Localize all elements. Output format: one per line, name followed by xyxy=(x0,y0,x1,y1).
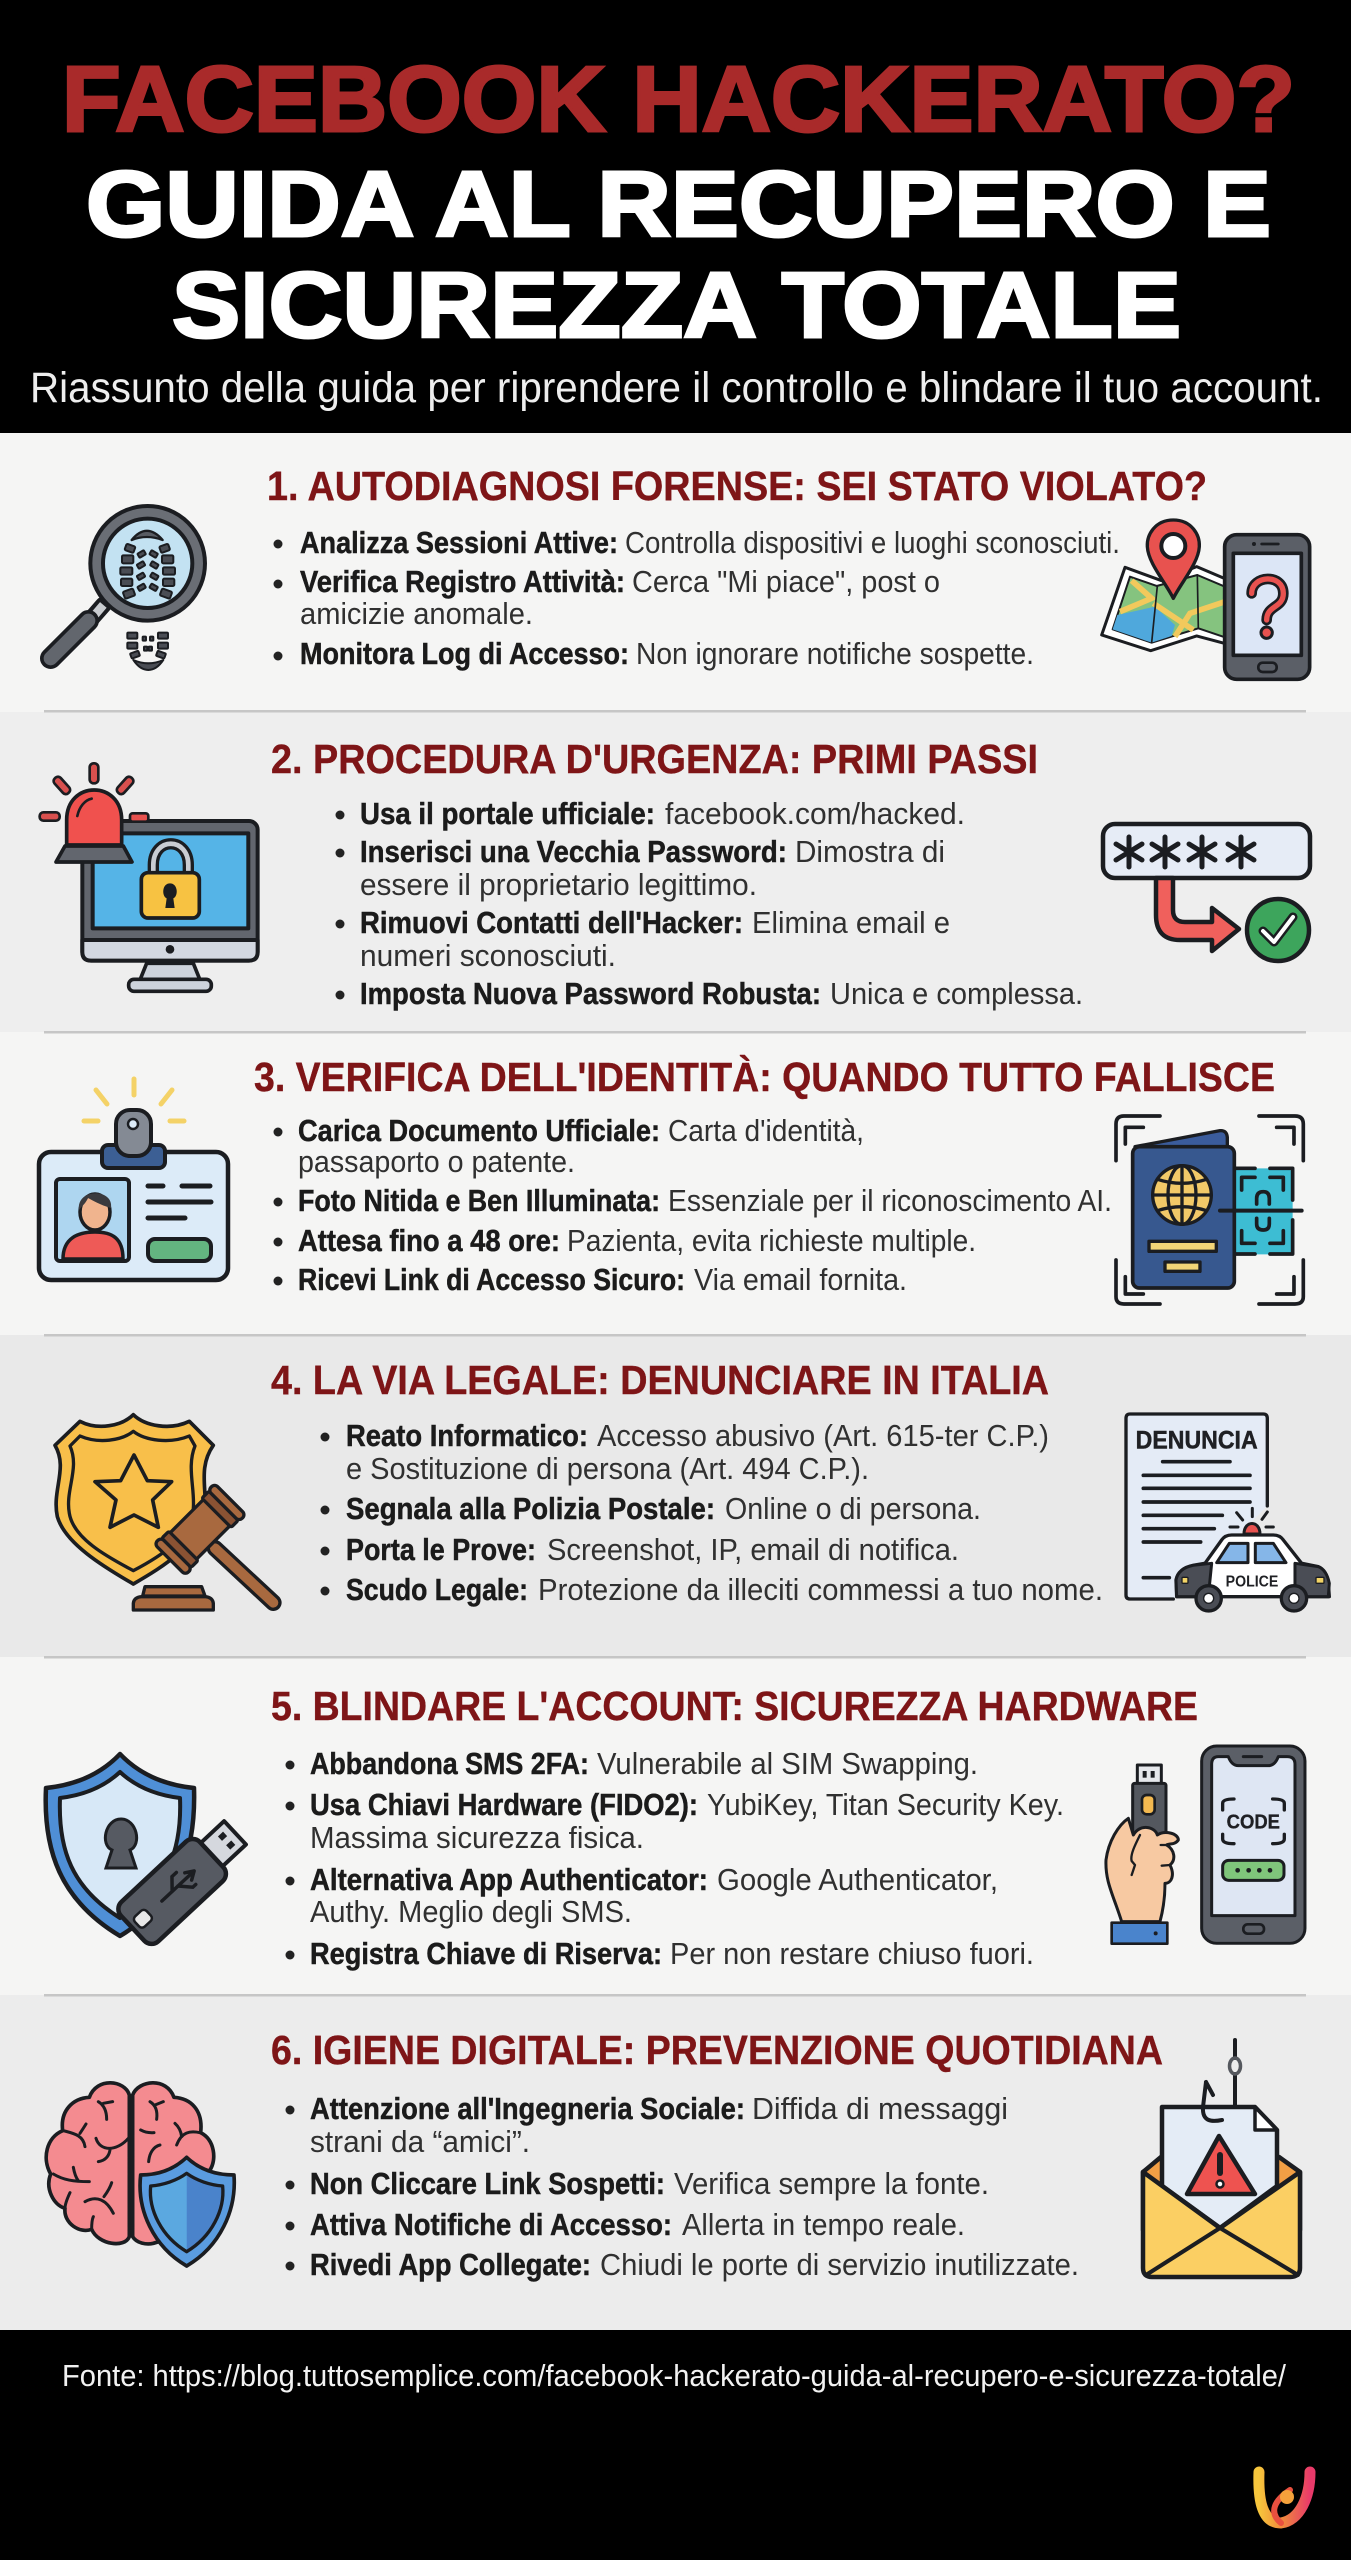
icon: brain with shield xyxy=(46,2083,234,2266)
icon: shield with keyhole and USB key xyxy=(46,1754,253,1948)
bullet list 1: Controlla dispositivi e luoghi sconosciuti. xyxy=(625,525,1120,560)
bullet list 1: Cerca "Mi piace", post o xyxy=(632,564,940,599)
bullet list 2 xyxy=(336,796,1083,1011)
bullet list 6: Allerta in tempo reale. xyxy=(682,2207,965,2242)
bullet list 1: Verifica Registro Attività: xyxy=(300,564,625,599)
bullet list 4: Online o di persona. xyxy=(725,1491,981,1526)
heading 4: 4. LA VIA LEGALE: DENUNCIARE IN ITALIA xyxy=(271,1357,1049,1403)
bullet list 3: Attesa fino a 48 ore: xyxy=(298,1223,560,1258)
bullet list 5: Registra Chiave di Riserva: xyxy=(310,1936,662,1971)
bullet list 1: Monitora Log di Accesso: xyxy=(300,636,629,671)
panel: section 5 blindare account xyxy=(0,1656,1351,1995)
icon: magnifier on footprint xyxy=(51,506,205,670)
bullet list 2: Unica e complessa. xyxy=(830,976,1083,1011)
icon: passport scan xyxy=(1116,1116,1303,1304)
heading 2: 2. PROCEDURA D'URGENZA: PRIMI PASSI xyxy=(271,736,1038,782)
bullet list 3: Foto Nitida e Ben Illuminata: xyxy=(298,1183,660,1218)
bullet list 2: Usa il portale ufficiale: xyxy=(360,796,655,831)
bullet list 5: Authy. Meglio degli SMS. xyxy=(310,1894,632,1929)
bullet list 5: YubiKey, Titan Security Key. xyxy=(707,1787,1064,1822)
bullet list 3: Pazienta, evita richieste multiple. xyxy=(567,1223,976,1258)
icon: denuncia document and police car: DENUNCIA xyxy=(1136,1426,1258,1454)
bullet list 2: numeri sconosciuti. xyxy=(360,938,616,973)
panel: section 4 via legale xyxy=(0,1334,1351,1657)
bullet list 3: Ricevi Link di Accesso Sicuro: xyxy=(298,1262,685,1297)
bullet list 6: Non Cliccare Link Sospetti: xyxy=(310,2166,665,2201)
bullet list 5: Per non restare chiuso fuori. xyxy=(670,1936,1034,1971)
bullet list 3 xyxy=(274,1113,1112,1297)
bullet list 6: Attenzione all'Ingegneria Sociale: xyxy=(310,2091,745,2126)
panel: section 6 igiene digitale xyxy=(0,1994,1351,2330)
bullet list 3: Carta d'identità, xyxy=(668,1113,864,1148)
bullet list 4: e Sostituzione di persona (Art. 494 C.P.). xyxy=(346,1451,869,1486)
bullet list 2: Rimuovi Contatti dell'Hacker: xyxy=(360,905,743,940)
icon: phishing envelope with hook xyxy=(1143,2040,1300,2277)
bullet list 4: Porta le Prove: xyxy=(346,1532,536,1567)
bullet list 2: essere il proprietario legittimo. xyxy=(360,867,757,902)
bullet list 6: Diffida di messaggi xyxy=(752,2091,1008,2126)
bullet list 4: Protezione da illeciti commessi a tuo nome. xyxy=(538,1572,1103,1607)
icon: denuncia document and police car: POLICE xyxy=(1226,1574,1278,1591)
icon: hand with key and phone code: CODE xyxy=(1227,1810,1280,1833)
bullet list 4 xyxy=(320,1418,1103,1607)
bullet list 2: Elimina email e xyxy=(752,905,950,940)
icon: ID badge xyxy=(39,1079,228,1280)
bullet list 1: Non ignorare notifiche sospette. xyxy=(636,636,1034,671)
bullet list 4: Segnala alla Polizia Postale: xyxy=(346,1491,715,1526)
bullet list 6: Rivedi App Collegate: xyxy=(310,2247,591,2282)
bullet list 5 xyxy=(286,1746,1064,1971)
bullet list 6: Verifica sempre la fonte. xyxy=(674,2166,989,2201)
icon: password field with arrow and check xyxy=(1103,824,1310,961)
icon: denuncia document and police car xyxy=(1126,1414,1329,1611)
bullet list 5: Usa Chiavi Hardware (FIDO2): xyxy=(310,1787,698,1822)
bullet list 3: Via email fornita. xyxy=(694,1262,907,1297)
panel: section 2 urgenza xyxy=(0,710,1351,1032)
bullet list 4: Screenshot, IP, email di notifica. xyxy=(547,1532,959,1567)
bullet list 3: passaporto o patente. xyxy=(298,1144,575,1179)
bullet list 5: Massima sicurezza fisica. xyxy=(310,1820,644,1855)
icon: monitor with lock and siren xyxy=(40,763,258,991)
bullet list 2: Inserisci una Vecchia Password: xyxy=(360,834,787,869)
bullet list 3: Essenziale per il riconoscimento AI. xyxy=(668,1183,1112,1218)
bullet list 6: Chiudi le porte di servizio inutilizzate. xyxy=(600,2247,1079,2282)
panel: section 3 identita xyxy=(0,1031,1351,1335)
panel: section 1 autodiagnosi xyxy=(0,433,1351,712)
source line: Fonte: https://blog.tuttosemplice.com/facebook-hackerato-guida-al-recupero-e-sicurezza-totale/ xyxy=(62,2358,1286,2393)
bullet list 4: Accesso abusivo (Art. 615-ter C.P.) xyxy=(597,1418,1049,1453)
bullet list 1 xyxy=(274,525,1120,671)
title line 1: FACEBOOK HACKERATO? xyxy=(62,47,1295,151)
logo xyxy=(1259,2472,1310,2523)
bullet list 4: Reato Informatico: xyxy=(346,1418,588,1453)
bullet list 1: Analizza Sessioni Attive: xyxy=(300,525,618,560)
bullet list 3: Carica Documento Ufficiale: xyxy=(298,1113,660,1148)
bullet list 6: Attiva Notifiche di Accesso: xyxy=(310,2207,672,2242)
title line 3: SICUREZZA TOTALE xyxy=(172,253,1181,357)
bullet list 5: Vulnerabile al SIM Swapping. xyxy=(597,1746,978,1781)
bullet list 5: Alternativa App Authenticator: xyxy=(310,1862,708,1897)
heading 6: 6. IGIENE DIGITALE: PREVENZIONE QUOTIDIANA xyxy=(271,2027,1163,2073)
title line 2: GUIDA AL RECUPERO E xyxy=(86,152,1271,256)
bullet list 1: amicizie anomale. xyxy=(300,596,533,631)
bullet list 4: Scudo Legale: xyxy=(346,1572,528,1607)
bullet list 6: strani da “amici”. xyxy=(310,2124,530,2159)
icon: hand with key and phone code xyxy=(1106,1746,1305,1944)
header panel xyxy=(0,0,1351,433)
heading 1: 1. AUTODIAGNOSI FORENSE: SEI STATO VIOLATO? xyxy=(267,463,1207,509)
bullet list 2: Imposta Nuova Password Robusta: xyxy=(360,976,821,1011)
bullet list 6 xyxy=(286,2091,1079,2282)
bullet list 5: Google Authenticator, xyxy=(717,1862,998,1897)
footer panel xyxy=(0,2330,1351,2560)
bullet list 5: Abbandona SMS 2FA: xyxy=(310,1746,589,1781)
heading 3: 3. VERIFICA DELL'IDENTITÀ: QUANDO TUTTO FALLISCE xyxy=(254,1054,1275,1100)
icon: police badge and gavel xyxy=(55,1415,273,1610)
heading 5: 5. BLINDARE L'ACCOUNT: SICUREZZA HARDWARE xyxy=(271,1683,1198,1729)
bullet list 2: Dimostra di xyxy=(795,834,945,869)
bullet list 2: facebook.com/hacked. xyxy=(665,796,965,831)
icon: map pin and phone with question mark xyxy=(1102,520,1310,679)
